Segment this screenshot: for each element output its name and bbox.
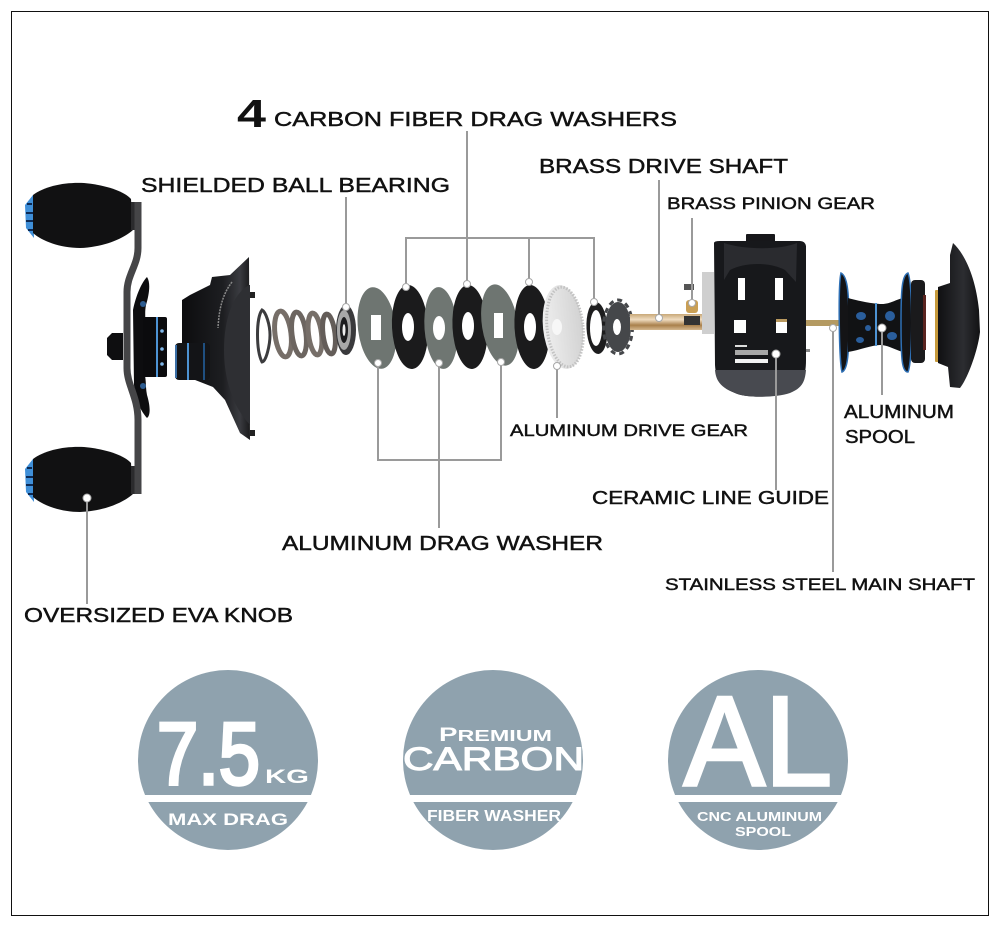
label: aluminum drive gear: ALUMINUM DRIVE GEAR (510, 421, 748, 440)
icon: ratchet gear (604, 300, 632, 354)
label: brass drive shaft: BRASS DRIVE SHAFT (539, 156, 788, 178)
heading: carbon fiber drag washers (237, 93, 677, 136)
icon: side plate (175, 257, 255, 440)
icon: brass pinion gear (684, 272, 714, 334)
leader dots (83, 278, 886, 502)
badge: AL CNC aluminum spool: CNC ALUMINUM (697, 809, 822, 824)
badge: premium carbon fiber washer: CARBON (403, 741, 584, 777)
icon: star adjuster knob (175, 343, 210, 380)
icon: handle nut (107, 333, 123, 360)
reel handle assembly (25, 183, 167, 512)
icon: stainless main shaft (806, 320, 842, 326)
icon: spring washers and clip (258, 310, 337, 362)
icon: carbon washer 1 (390, 284, 430, 370)
heading: carbon fiber drag washers: CARBON FIBER DRAG WASHERS (274, 108, 677, 131)
label: aluminum drag washer: ALUMINUM DRAG WASHER (282, 533, 603, 555)
badge: AL CNC aluminum spool: SPOOL (735, 824, 791, 839)
label: oversized EVA knob: OVERSIZED EVA KNOB (24, 605, 293, 627)
badge: premium carbon fiber washer: FIBER WASHER (427, 808, 561, 825)
label: ceramic line guide: CERAMIC LINE GUIDE (592, 488, 829, 508)
icon: star drag wheel (133, 277, 150, 418)
icon: aluminum washer 2 (422, 286, 460, 370)
icon: aluminum washer 1 (353, 285, 401, 371)
icon: bottom EVA knob (25, 447, 137, 512)
icon: reel frame (714, 234, 810, 397)
icon: ball bearing (336, 305, 356, 355)
badge: 7.5 kg max drag: KG (265, 767, 309, 788)
badge: AL CNC aluminum spool: AL (684, 670, 832, 812)
icon: small carbon washer (585, 301, 609, 355)
drag washer stack (353, 282, 632, 371)
badge: 7.5 kg max drag (130, 670, 330, 850)
icon: aluminum spool (839, 273, 926, 372)
icon: right side cover (935, 243, 980, 388)
label: brass pinion gear: BRASS PINION GEAR (667, 194, 875, 213)
label: stainless steel main shaft: STAINLESS STEEL MAIN SHAFT (665, 575, 975, 594)
label: aluminum spool (844, 402, 954, 447)
badge: AL CNC aluminum spool (660, 670, 856, 850)
icon: top EVA knob (25, 183, 137, 248)
icon: drag drum (143, 317, 167, 377)
badge: premium carbon fiber washer: P REMIUM (439, 725, 552, 746)
icon: brass drive shaft (630, 314, 704, 330)
heading: carbon fiber drag washers: 4 (237, 93, 266, 136)
icon: aluminum drive gear (539, 283, 587, 371)
icon: carbon handle arm (127, 202, 138, 494)
label: aluminum spool: ALUMINUM (844, 402, 954, 422)
icon: aluminum washer 3 (476, 282, 524, 368)
badge: 7.5 kg max drag: MAX DRAG (168, 810, 288, 829)
badge: 7.5 kg max drag: 7.5 (157, 704, 260, 803)
label: aluminum spool: SPOOL (845, 427, 915, 447)
icon: carbon washer 3 (512, 284, 552, 370)
label: shielded ball bearing: SHIELDED BALL BEARING (141, 175, 450, 197)
leader lines (87, 131, 882, 604)
icon: carbon washer 2 (450, 284, 490, 370)
badge: premium carbon fiber washer (395, 670, 591, 850)
